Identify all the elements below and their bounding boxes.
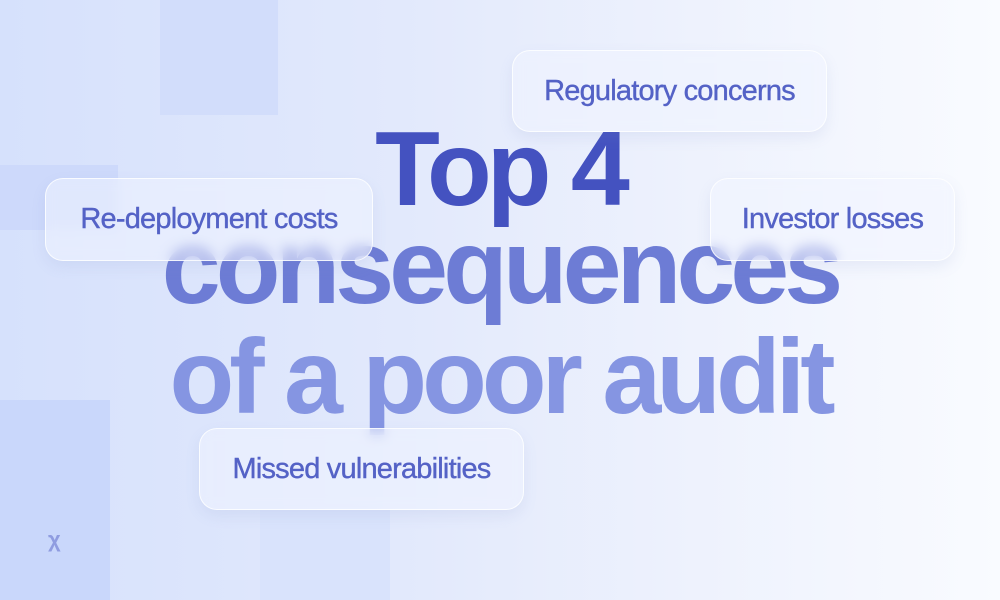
title: consequences [162, 208, 838, 326]
title [162, 110, 840, 438]
pill: regulatory concerns: Regulatory concerns [544, 74, 795, 106]
title: of a poor audit [169, 318, 831, 436]
pill: regulatory concerns [512, 50, 827, 132]
pill: re-deployment costs [45, 178, 373, 261]
pill: missed vulnerabilities [199, 428, 524, 510]
pill: re-deployment costs: Re-deployment costs [80, 203, 338, 235]
pill: missed vulnerabilities: Missed vulnerabilities [232, 452, 490, 484]
pill: investor losses: Investor losses [742, 203, 923, 235]
title: Top 4 [375, 110, 625, 228]
pill: investor losses [710, 178, 955, 261]
logo: χ [48, 527, 61, 552]
